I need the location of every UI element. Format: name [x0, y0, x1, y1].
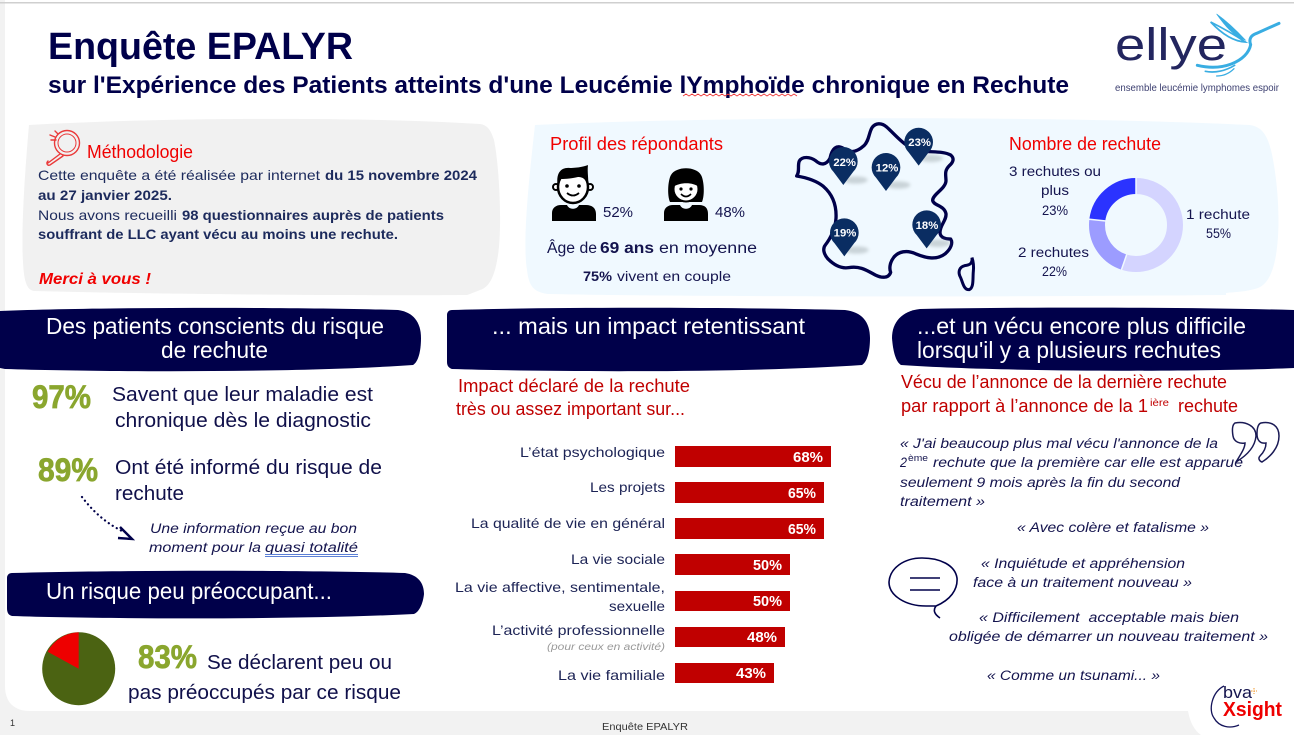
logo: ellye: ensemble leucémie lymphomes espoir	[1115, 82, 1279, 94]
label: 3 rechutes: plus	[1041, 183, 1069, 198]
header: préoccupant: Un risque peu préoccupant...	[46, 578, 332, 604]
subheading: impact: Impact déclaré de la rechute	[458, 376, 690, 396]
text block: méthodologie: du 15 novembre 2024	[325, 167, 477, 183]
couple: vivent en couple	[617, 268, 731, 284]
quote 1	[899, 436, 1243, 509]
donut chart	[1087, 176, 1175, 271]
icon: magnifier	[47, 130, 80, 165]
quote 3: « Inquiétude et appréhension	[981, 556, 1185, 571]
subheading: impact	[456, 376, 690, 419]
quote 2: « Avec colère et fatalisme »	[1017, 520, 1209, 535]
heading: méthodologie: Méthodologie	[87, 142, 193, 162]
text block: méthodologie: Nous avons recueilli	[38, 207, 177, 223]
corsica	[959, 258, 974, 290]
bar: activité professionnelle: (pour ceux en activité)	[547, 642, 665, 653]
label: 2 rechutes: 2 rechutes	[1018, 245, 1089, 260]
text block: méthodologie: au 27 janvier 2025.	[38, 187, 172, 203]
quote 4: « Difficilement acceptable mais bien	[979, 610, 1239, 625]
label: 1 rechute: 1 rechute	[1186, 207, 1250, 222]
text block: méthodologie: 98 questionnaires auprès de patients	[182, 207, 444, 223]
icon: homme	[552, 165, 596, 221]
panel: profil	[525, 118, 1278, 296]
header: conscients: Des patients conscients du risque	[46, 313, 384, 339]
header: impact	[447, 308, 870, 371]
icon: femme	[664, 168, 708, 221]
quote 1: rechute que la première car elle est apparue	[933, 455, 1243, 470]
footer: Enquête EPALYR	[602, 722, 688, 733]
percentage: homme: 52%	[603, 204, 633, 221]
quote 1: « J'ai beaucoup plus mal vécu l'annonce de la	[900, 436, 1219, 451]
subheading: impact: très ou assez important sur...	[456, 399, 685, 419]
bar: projets: 65%	[788, 485, 816, 502]
couple	[583, 268, 731, 284]
panel: peu préoccupant	[7, 571, 424, 705]
label: 2 rechutes	[1018, 245, 1089, 279]
bar: activité professionnelle: L’activité professionnelle	[492, 622, 665, 638]
bar: vie familiale	[558, 663, 774, 683]
bar: vie sociale: La vie sociale	[571, 551, 665, 567]
panel: impact	[447, 308, 870, 683]
stat: 97%: chronique dès le diagnostic	[115, 410, 371, 432]
percentage: femme: 48%	[715, 204, 745, 221]
panel: conscients	[0, 308, 421, 556]
bar: état psychologique: 68%	[793, 449, 823, 466]
header: vécu	[892, 308, 1294, 371]
bar: projets: Les projets	[590, 479, 665, 495]
header: vécu: lorsqu'il y a plusieurs rechutes	[917, 337, 1221, 363]
quote 1: traitement »	[900, 494, 985, 509]
bar: qualité de vie	[471, 515, 824, 539]
quote 3	[973, 556, 1192, 590]
age moyen: 69 ans	[600, 240, 654, 257]
stat: 89%: Ont été informé du risque de	[115, 457, 382, 479]
arrow: dotted	[82, 497, 132, 539]
subheading: vécu: Vécu de l’annonce de la dernière rechute	[901, 372, 1227, 392]
stat: 83%: 83%	[138, 639, 197, 675]
header: conscients: de rechute	[161, 337, 268, 363]
text block: méthodologie	[38, 167, 477, 242]
quote 5: « Comme un tsunami... »	[987, 668, 1160, 683]
age moyen	[547, 240, 757, 257]
page number: 1	[10, 718, 15, 728]
label: 3 rechutes: 23%	[1042, 203, 1068, 218]
logo: ellye	[1115, 14, 1279, 94]
logo: bva xsight	[1211, 683, 1282, 727]
text block: information: Une information reçue au bon	[150, 521, 357, 536]
header: conscients	[0, 308, 421, 371]
stat: 97%: Savent que leur maladie est	[112, 384, 373, 406]
couple: 75%	[583, 268, 613, 284]
bar: état psychologique	[520, 444, 831, 467]
pin: 18%: 18%	[916, 220, 939, 232]
age moyen: en moyenne	[659, 240, 757, 257]
merci: Merci à vous !	[39, 271, 152, 288]
bar: qualité de vie: La qualité de vie en général	[471, 515, 665, 531]
quote 1: 2	[899, 455, 907, 470]
stat: 83%: pas préoccupés par ce risque	[128, 682, 401, 704]
bar: état psychologique: L’état psychologique	[520, 444, 665, 460]
age moyen: Âge de	[547, 240, 597, 257]
bar: vie familiale: 43%	[736, 665, 766, 682]
label: 1 rechute	[1186, 207, 1250, 241]
header: impact: ... mais un impact retentissant	[492, 313, 806, 339]
pie chart	[42, 632, 115, 705]
logo: bva xsight: bva	[1223, 683, 1253, 702]
text block: information	[149, 521, 358, 556]
stat: 89%	[38, 452, 382, 505]
bar: vie sociale	[571, 551, 790, 575]
quote 4: obligée de démarrer un nouveau traitement »	[949, 629, 1268, 644]
subheading: vécu: ière	[1150, 398, 1169, 409]
pin: 12%	[872, 153, 900, 191]
subtitle: sur l'Expérience des Patients atteints d'une Leucémie lYmphoïde chronique en Rechute	[48, 72, 1069, 99]
subheading: vécu: par rapport à l’annonce de la 1	[901, 396, 1148, 416]
header: vécu: ...et un vécu encore plus difficile	[917, 313, 1246, 339]
quote 1: seulement 9 mois après la fin du second	[900, 475, 1181, 490]
bar: vie familiale: La vie familiale	[558, 667, 665, 683]
heading: nombre de rechute: Nombre de rechute	[1009, 134, 1161, 154]
stat: 83%: Se déclarent peu ou	[207, 652, 392, 674]
pin: 12%: 12%	[876, 163, 899, 175]
text block: information: quasi totalité	[265, 540, 358, 555]
pin: 22%: 22%	[833, 157, 856, 169]
icon: quotation marks	[1232, 423, 1279, 462]
quote 1: ème	[908, 453, 928, 463]
label: 3 rechutes	[1009, 164, 1101, 218]
quote 3: face à un traitement nouveau »	[973, 575, 1192, 590]
text block: méthodologie: souffrant de LLC ayant vécu au moins une rechute.	[38, 226, 398, 242]
pin: 22%	[829, 147, 858, 185]
bar chart	[455, 444, 831, 683]
bar: activité professionnelle: 48%	[747, 629, 777, 646]
stat: 83%	[128, 639, 401, 704]
title: Enquête EPALYR	[48, 26, 353, 68]
logo: bva xsight: Xsight	[1223, 699, 1282, 721]
bar: vie affective: La vie affective, sentimentale,	[455, 579, 665, 595]
text block: information: moment pour la	[149, 540, 262, 555]
bar: vie affective	[455, 579, 790, 614]
subheading: vécu: rechute	[1178, 396, 1238, 416]
stat: 97%: 97%	[32, 379, 91, 415]
pin: 23%	[904, 128, 933, 166]
stat: 97%	[32, 379, 373, 432]
logo: ellye: ellye	[1115, 19, 1227, 70]
header: préoccupant	[7, 571, 424, 618]
bar: projets	[590, 479, 824, 503]
pin: 23%: 23%	[908, 137, 931, 149]
label: 1 rechute: 55%	[1206, 226, 1231, 241]
heading: profil: Profil des répondants	[550, 134, 723, 154]
text block: méthodologie: Cette enquête a été réalisée par internet	[38, 167, 320, 183]
bar: vie sociale: 50%	[753, 557, 782, 574]
bar: activité professionnelle	[492, 622, 785, 653]
quote 4	[949, 610, 1268, 644]
subheading: vécu	[901, 372, 1238, 416]
label: 2 rechutes: 22%	[1042, 264, 1067, 279]
stat: 89%: rechute	[115, 483, 184, 505]
map: France	[797, 124, 974, 290]
panel: vécu	[889, 308, 1294, 683]
icon: speech bubble	[889, 558, 957, 618]
label: 3 rechutes: 3 rechutes ou	[1009, 164, 1101, 179]
bar: qualité de vie: 65%	[788, 521, 816, 538]
pin: 18%	[912, 210, 941, 248]
pin: 19%	[830, 218, 859, 256]
pin: 19%: 19%	[834, 228, 857, 240]
panel: méthodologie	[22, 119, 500, 295]
stat: 89%: 89%	[38, 452, 98, 488]
bar: vie affective: sexuelle	[609, 598, 665, 614]
bar: vie affective: 50%	[753, 593, 782, 610]
